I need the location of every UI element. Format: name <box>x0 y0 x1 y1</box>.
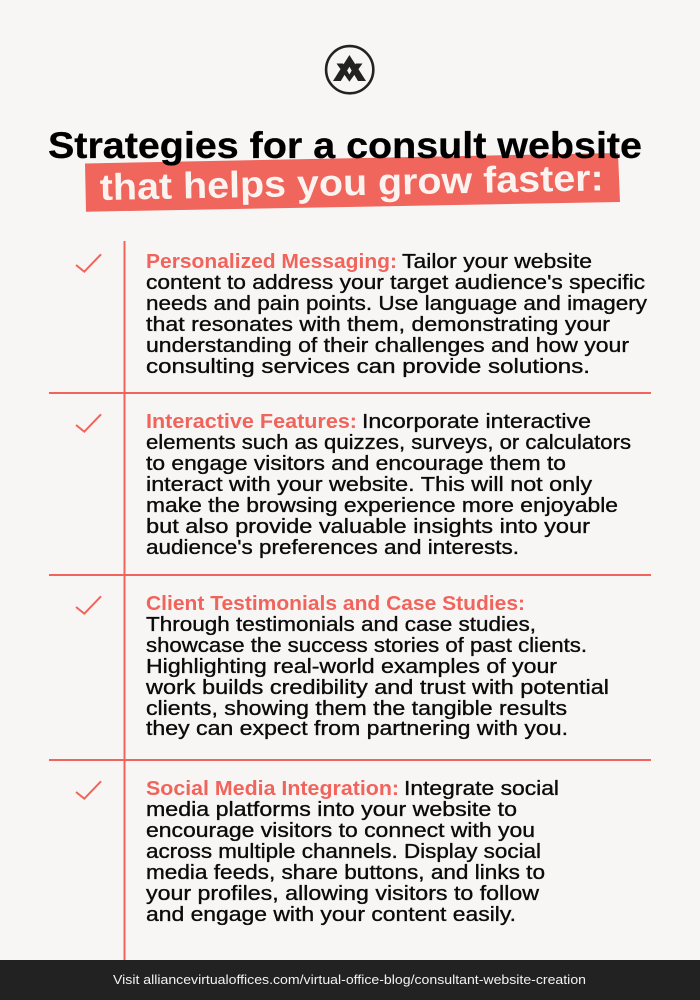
text block: social media integration: and engage with your content easily. <box>146 904 516 926</box>
text block: client testimonials: showcase the success stories of past clients. <box>146 635 587 657</box>
text block: social media integration <box>146 778 559 926</box>
title: Strategies for a consult website <box>48 125 642 166</box>
icon: check 1 <box>76 254 101 272</box>
text block: interactive features: to engage visitors and encourage them to <box>146 453 566 475</box>
icon: check 3 <box>76 596 101 614</box>
text block: personalized messaging <box>146 251 647 378</box>
footer text: Visit alliancevirtualoffices.com/virtual-office-blog/consultant-website-creation <box>113 972 586 987</box>
text block: social media integration: your profiles, allowing visitors to follow <box>146 883 540 905</box>
text block: personalized messaging: Personalized Messaging: <box>146 251 397 273</box>
text block: social media integration: encourage visitors to connect with you <box>146 820 535 842</box>
text block: interactive features <box>146 411 631 559</box>
text block: personalized messaging: content to address your target audience's specific <box>146 272 645 294</box>
text block: social media integration: Integrate social <box>404 778 559 800</box>
text block: personalized messaging: Tailor your website <box>402 251 592 273</box>
icon: check 2 <box>76 414 101 432</box>
text block: client testimonials: Client Testimonials and Case Studies: <box>146 593 525 615</box>
banner <box>85 153 620 212</box>
text block: interactive features: interact with your website. This will not only <box>146 474 592 496</box>
vertical rule <box>124 241 126 960</box>
text block: social media integration: media platforms into your website to <box>146 799 517 821</box>
horizontal rule 1 <box>49 392 651 394</box>
text block: interactive features: audience's preferences and interests. <box>146 537 519 559</box>
footer bar <box>0 960 700 1000</box>
text block: interactive features: make the browsing experience more enjoyable <box>146 495 618 517</box>
text block: interactive features: Interactive Features: <box>146 411 357 433</box>
text block: interactive features: Incorporate interactive <box>362 411 591 433</box>
text block: client testimonials: they can expect from partnering with you. <box>146 718 568 740</box>
subtitle: that helps you grow faster: <box>99 157 604 208</box>
icon: logo <box>326 46 373 93</box>
horizontal rule 2 <box>49 574 651 576</box>
text block: client testimonials: Highlighting real-world examples of your <box>146 656 557 678</box>
text block: interactive features: elements such as quizzes, surveys, or calculators <box>146 432 631 454</box>
text block: personalized messaging: that resonates with them, demonstrating your <box>146 314 610 336</box>
icon: check 4 <box>76 781 101 799</box>
text block: social media integration: media feeds, share buttons, and links to <box>146 862 545 884</box>
text block: client testimonials: work builds credibility and trust with potential <box>145 677 609 699</box>
text block: social media integration: Social Media Integration: <box>146 778 399 800</box>
text block: social media integration: across multiple channels. Display social <box>146 841 541 863</box>
text block: personalized messaging: understanding of their challenges and how your <box>146 335 629 357</box>
text block: client testimonials: Through testimonials and case studies, <box>146 614 536 636</box>
text block: personalized messaging: needs and pain points. Use language and imagery <box>146 293 647 315</box>
text block: interactive features: but also provide valuable insights into your <box>146 516 590 538</box>
text block: client testimonials <box>145 593 609 740</box>
text block: personalized messaging: consulting services can provide solutions. <box>146 356 590 378</box>
text block: client testimonials: clients, showing them the tangible results <box>146 698 567 720</box>
horizontal rule 3 <box>49 759 651 761</box>
